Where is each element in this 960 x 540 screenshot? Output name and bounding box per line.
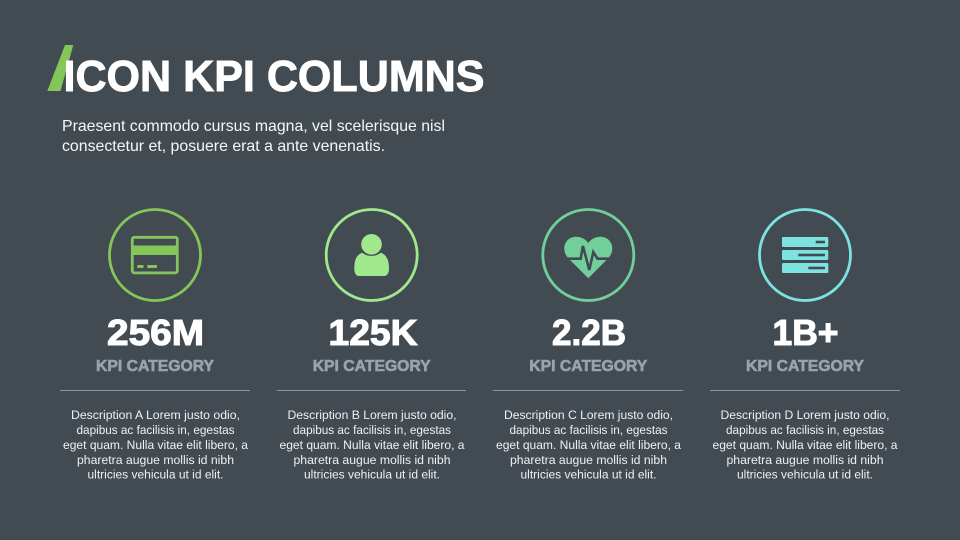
panel: KPI column C bbox=[493, 210, 683, 482]
KPI category: KPI CATEGORY bbox=[96, 358, 214, 375]
description: eget quam. Nulla vitae elit libero, a bbox=[712, 438, 898, 452]
description bbox=[712, 408, 898, 482]
green slash accent bbox=[47, 45, 73, 91]
KPI value: 2.2B bbox=[552, 312, 626, 353]
description: ultricies vehicula ut id elit. bbox=[88, 468, 224, 482]
description: eget quam. Nulla vitae elit libero, a bbox=[280, 438, 465, 452]
description: Description B Lorem justo odio, bbox=[288, 408, 456, 422]
description: Description C Lorem justo odio, bbox=[504, 408, 673, 422]
KPI category: KPI CATEGORY bbox=[746, 358, 864, 375]
KPI category: KPI CATEGORY bbox=[313, 358, 431, 375]
icon: server stack bbox=[760, 210, 850, 300]
description: dapibus ac facilisis in, egestas bbox=[293, 423, 451, 437]
description: Description A Lorem justo odio, bbox=[71, 408, 240, 422]
subtitle bbox=[62, 118, 445, 155]
description: pharetra augue mollis id nibh bbox=[294, 453, 450, 467]
KPI category: KPI CATEGORY bbox=[529, 358, 648, 375]
description: eget quam. Nulla vitae elit libero, a bbox=[63, 438, 248, 452]
KPI value: 1B+ bbox=[772, 312, 838, 353]
description: pharetra augue mollis id nibh bbox=[726, 453, 884, 467]
description: eget quam. Nulla vitae elit libero, a bbox=[496, 438, 681, 452]
description: dapibus ac facilisis in, egestas bbox=[726, 423, 884, 437]
description: dapibus ac facilisis in, egestas bbox=[76, 423, 234, 437]
description: ultricies vehicula ut id elit. bbox=[737, 468, 873, 482]
header bbox=[47, 45, 485, 155]
description: Description D Lorem justo odio, bbox=[720, 408, 890, 422]
description: ultricies vehicula ut id elit. bbox=[304, 468, 440, 482]
description: pharetra augue mollis id nibh bbox=[77, 453, 234, 467]
icon: heart with pulse bbox=[543, 210, 634, 300]
description bbox=[280, 408, 465, 482]
panel: KPI column D bbox=[710, 210, 900, 482]
subtitle: Praesent commodo cursus magna, vel scelerisque nisl bbox=[62, 118, 445, 135]
subtitle: consectetur et, posuere erat a ante venenatis. bbox=[62, 138, 385, 155]
KPI value: 125K bbox=[328, 312, 418, 353]
description: ultricies vehicula ut id elit. bbox=[520, 468, 656, 482]
description: pharetra augue mollis id nibh bbox=[510, 453, 667, 467]
description bbox=[496, 408, 681, 482]
icon: credit card bbox=[110, 210, 200, 300]
description bbox=[63, 408, 248, 482]
icon: person bbox=[326, 210, 417, 300]
panel: KPI column B bbox=[277, 210, 466, 482]
description: dapibus ac facilisis in, egestas bbox=[510, 423, 668, 437]
title: ICON KPI COLUMNS bbox=[64, 52, 484, 101]
panel: KPI column A bbox=[60, 210, 250, 482]
KPI value: 256M bbox=[107, 312, 204, 353]
